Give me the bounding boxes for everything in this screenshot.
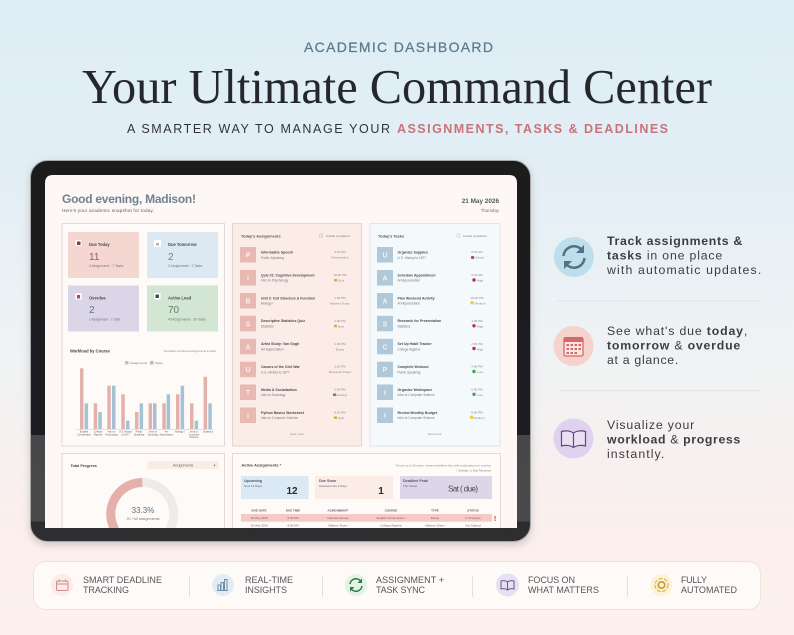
assignments table: Essay: [431, 516, 440, 520]
row: research presentation: [377, 316, 483, 331]
row: python: I: [247, 413, 249, 420]
row: cell structure: 1:00 PM: [334, 296, 346, 300]
row: complete workout: Public Speaking: [398, 370, 421, 374]
benefit: automated: FULLY: [681, 575, 708, 585]
row: organize supplies: Organize Supplies: [398, 250, 428, 254]
subtitle: ASSIGNMENTS, TASKS & DEADLINES: [397, 122, 668, 136]
assignments table: COURSE: [385, 508, 397, 512]
row: quiz 2: 10:00 PM: [333, 273, 347, 277]
stat: deadline peak: [400, 476, 492, 499]
benefit: task sync: [345, 574, 445, 596]
bar chart: workload by course: Speaking: [134, 433, 145, 436]
panel: today's assignments: Today's Assignments: [241, 234, 281, 238]
date: 21 May 2026: [462, 198, 499, 205]
row: organize supplies: U: [382, 252, 388, 260]
dropdown: [148, 461, 219, 469]
row: set up habit tracker: Set Up Habit Tracker: [398, 342, 432, 346]
row: complete workout: P: [383, 367, 388, 374]
assignments table: 19 May 2026: [250, 524, 268, 528]
row: python: Python Basics Worksheet: [261, 411, 305, 415]
row: schedule appointment: 9:30 AM: [471, 273, 483, 277]
greeting: Here's your academic snapshot for today.: [62, 208, 154, 213]
row: statistics quiz: S: [246, 321, 251, 328]
benefit: task sync: ASSIGNMENT +: [376, 575, 445, 585]
assignments table: Narrative Essay: [327, 516, 349, 520]
row: complete workout: [377, 362, 484, 377]
benefit: focus: [496, 574, 600, 596]
row: cell structure: B: [245, 298, 251, 306]
panel: today's tasks: [370, 224, 500, 446]
greeting: Good evening, Madison!: [62, 192, 196, 206]
row: civil war: Causes of the Civil War: [261, 365, 300, 369]
row: civil war: U: [245, 367, 251, 374]
assignments table: !: [494, 516, 496, 523]
bar chart: workload by course: Intro to: [190, 430, 198, 434]
row: research presentation: High: [477, 324, 483, 328]
row: statistics quiz: [240, 316, 346, 331]
eyebrow: ACADEMIC DASHBOARD: [304, 39, 493, 55]
row: python: 8:00 PM: [334, 410, 346, 414]
bar chart: workload by course: Sociology: [148, 433, 159, 436]
divider: [558, 390, 761, 391]
row: informative speech: [240, 247, 349, 262]
dropdown: ▾: [214, 464, 216, 468]
feature text: workload & progress: [606, 432, 741, 446]
chart legend: Tasks: [155, 361, 163, 365]
row: van gogh: Artist Study: Van Gogh: [261, 342, 299, 346]
row: review monthly budget: Intro to Computer Science: [398, 416, 435, 420]
feature text: See what's due today,: [607, 324, 748, 338]
feature: track assignments: [554, 234, 762, 277]
bar chart: workload by course: English: [80, 430, 89, 434]
row: set up habit tracker: High: [477, 347, 483, 351]
panel: active assignments: * Shows up to 20 active, nearest deadlines first, with exclamations on overdue: [394, 464, 491, 468]
benefit: deadline tracking: [51, 574, 163, 596]
greeting: [62, 194, 195, 213]
bar chart: workload by course: Intro to: [108, 430, 116, 434]
benefit: focus: FOCUS ON: [528, 575, 576, 585]
row: van gogh: [240, 339, 346, 354]
bottom benefits bar: [34, 562, 760, 610]
row: research presentation: Research for Presentation: [398, 319, 441, 323]
feature text: Visualize your: [607, 418, 695, 432]
row: set up habit tracker: College Algebra: [398, 347, 420, 351]
card: overdue: 2: [89, 305, 95, 316]
row: civil war: [240, 362, 351, 377]
card: due tomorrow: [147, 232, 218, 278]
feature text: with automatic updates.: [606, 263, 762, 277]
card: due today: 4 Assignments · 7 Tasks: [89, 264, 124, 268]
assignments table: English Composition I: [376, 516, 406, 520]
assignments table: [241, 508, 496, 528]
card: overdue: Overdue: [89, 296, 106, 300]
row: set up habit tracker: 2:00 PM: [471, 342, 483, 346]
card: due today: 11: [89, 252, 100, 263]
panel: active assignments: ! Overdue ⚠ Due Tomorrow: [457, 468, 492, 472]
stat: due soon: 1: [378, 486, 384, 497]
donut chart: 20 / 60 assignments: [126, 517, 160, 521]
feature text: [606, 234, 762, 277]
stat: upcoming: Next 14 Days: [244, 484, 263, 488]
row: informative speech: P: [246, 252, 251, 260]
row: organize workspace: Intro to Computer Science: [398, 393, 435, 397]
feature: due dates: [554, 324, 748, 367]
chart heading: [70, 349, 216, 354]
row: python: [240, 408, 346, 423]
row: quiz 2: [240, 270, 347, 286]
subtitle: A SMARTER WAY TO MANAGE YOUR: [127, 122, 390, 136]
bar chart: workload by course: Psychology: [105, 433, 119, 436]
bar chart: workload by course: Intro to: [149, 430, 157, 434]
row: schedule appointment: A: [382, 276, 388, 282]
row: cell structure: Biology I: [261, 302, 273, 306]
panel: today's tasks: view more: [427, 432, 442, 436]
row: organize workspace: Low: [477, 393, 484, 397]
row: research presentation: Statistics: [398, 324, 411, 328]
row: plan weekend activity: 10:00 PM: [470, 296, 484, 300]
subtitle: [127, 122, 668, 136]
card: active load: 70: [168, 305, 180, 316]
panel: today's assignments: [232, 224, 362, 446]
assignments table: Midterm Exam: [328, 524, 348, 528]
row: van gogh: Essay: [336, 347, 345, 351]
row: set up habit tracker: [377, 339, 483, 354]
header: [82, 39, 712, 136]
row: review monthly budget: [377, 408, 485, 423]
stat: upcoming: 12: [286, 486, 298, 497]
panel: active assignments: [232, 454, 500, 534]
row: informative speech: Public Speaking: [261, 256, 284, 260]
row: civil war: Research Paper: [329, 370, 351, 374]
assignments table: Midterm Exam: [425, 524, 445, 528]
donut chart: [111, 482, 174, 546]
row: statistics quiz: Statistics: [261, 324, 274, 328]
bar chart: workload by course: to 1877: [121, 433, 130, 436]
card: active load: 40 Assignments · 30 Tasks: [168, 318, 206, 322]
feature text: at a glance.: [607, 353, 679, 367]
bar chart: workload by course: College: [94, 430, 103, 434]
row: organize supplies: [377, 247, 484, 262]
row: organize workspace: Organize Workspace: [398, 388, 432, 392]
row: review monthly budget: 8:00 PM: [471, 410, 483, 414]
feature text: tasks in one place: [607, 248, 723, 262]
panel: summary and workload: [62, 224, 224, 446]
panel: total progress: [62, 453, 225, 528]
assignments table: 8:00 AM: [287, 524, 299, 528]
row: review monthly budget: I: [384, 413, 386, 420]
stat: due soon: Due Soon: [319, 479, 337, 483]
bar chart: workload by course: Biology I: [175, 430, 185, 434]
row: informative speech: Informative Speech: [261, 250, 293, 254]
row: socialization: [240, 384, 347, 400]
date: [462, 198, 500, 213]
date: Thursday: [481, 208, 500, 213]
assignments table: TYPE: [431, 508, 439, 512]
assignments table: ASSIGNMENT*: [327, 508, 349, 512]
row: research presentation: S: [383, 321, 388, 328]
stat: due soon: [315, 476, 393, 499]
row: civil war: 5:30 PM: [334, 365, 346, 369]
bar chart: workload by course: Algebra: [94, 433, 103, 436]
feature: visualize: [554, 418, 741, 461]
row: socialization: Media & Socialization: [261, 388, 297, 392]
panel: active assignments: Active Assignments *: [242, 462, 282, 468]
row: python: Quiz: [338, 416, 345, 420]
row: quiz 2: I: [247, 276, 249, 282]
bar chart: workload by course: Art: [165, 430, 168, 434]
bar chart: workload by course: [76, 368, 214, 439]
row: complete workout: 4:00 PM: [471, 365, 483, 369]
assignments table: 9:00 PM: [287, 516, 299, 520]
row: schedule appointment: Art Appreciation: [398, 279, 420, 283]
row: informative speech: 9:30 AM: [334, 250, 346, 254]
row: socialization: Intro to Sociology: [261, 393, 286, 397]
row: plan weekend activity: Medium: [474, 301, 486, 305]
feature text: [606, 418, 741, 461]
row: schedule appointment: [377, 270, 483, 286]
row: python: Intro to Computer Science: [261, 416, 298, 420]
panel: today's tasks: Today's Tasks: [378, 234, 404, 238]
benefit: real-time insights: INSIGHTS: [245, 585, 288, 595]
row: quiz 2: Intro to Psychology: [261, 279, 289, 283]
assignments table: DUE DATE: [251, 508, 267, 512]
chart legend: Assignments: [130, 361, 148, 365]
donut chart: 33.3%: [132, 506, 154, 515]
feature text: instantly.: [607, 447, 665, 461]
card: due today: [68, 232, 139, 278]
benefit: automated: AUTOMATED: [681, 585, 738, 595]
assignments table: College Algebra: [380, 524, 402, 528]
feature text: [607, 324, 748, 367]
row: civil war: U.S. History to 1877: [261, 370, 290, 374]
benefit: deadline tracking: SMART DEADLINE: [83, 575, 163, 585]
bar chart: workload by course: Appreciation: [160, 433, 174, 436]
card: due tomorrow: Due Tomorrow: [168, 242, 197, 247]
row: cell structure: Unit 3: Cell Structure & Function: [261, 296, 315, 300]
assignments table: Not Started: [465, 524, 481, 528]
row: review monthly budget: Medium: [473, 416, 485, 420]
row: statistics quiz: Quiz: [338, 324, 345, 328]
panel: today's assignments: include completed: [326, 234, 350, 238]
benefit: real-time insights: [212, 574, 294, 596]
chart heading: Workload by Course: [70, 348, 110, 354]
row: complete workout: Complete Workout: [398, 365, 429, 369]
screen: [45, 175, 517, 546]
feature text: tomorrow & overdue: [607, 338, 741, 352]
bar chart: workload by course: Science: [190, 436, 199, 439]
row: socialization: T: [246, 390, 251, 397]
title: Your Ultimate Command Center: [82, 59, 712, 114]
row: organize supplies: 8:00 AM: [471, 250, 483, 254]
row: socialization: Reading: [335, 393, 347, 397]
icon: calendar: [554, 326, 594, 366]
row: schedule appointment: Schedule Appointment: [398, 273, 436, 277]
benefit: focus: WHAT MATTERS: [528, 585, 600, 595]
assignments table: DUE TIME: [286, 508, 300, 512]
row: statistics quiz: 2:00 PM: [334, 319, 346, 323]
panel: today's assignments: view more: [290, 432, 304, 436]
stat: deadline peak: This Week: [403, 484, 418, 488]
card: due today: Due Today: [89, 242, 110, 247]
row: van gogh: 4:00 PM: [334, 342, 346, 346]
row: schedule appointment: High: [477, 278, 483, 282]
row: organize workspace: [377, 384, 484, 400]
row: cell structure: Midterm Exam: [330, 301, 350, 305]
row: organize workspace: I: [384, 390, 386, 397]
panel: today's tasks: include completed: [463, 234, 487, 238]
bar chart: workload by course: Composition: [77, 433, 92, 436]
stat: upcoming: [241, 476, 308, 499]
benefit: automated: [650, 574, 738, 596]
divider: [557, 300, 760, 302]
tablet: [30, 160, 530, 546]
card: overdue: 1 Assignment · 1 Task: [89, 318, 121, 322]
dropdown: Assignments: [173, 464, 193, 468]
icon: open book: [554, 418, 594, 458]
row: informative speech: Presentation: [331, 256, 349, 260]
assignments table: STATUS: [467, 508, 479, 512]
bar chart: workload by course: U.S. History: [119, 430, 133, 434]
assignments table: In Progress: [465, 516, 481, 520]
stat: deadline peak: Deadline Peak: [403, 479, 429, 483]
benefit: real-time insights: REAL-TIME: [245, 575, 294, 585]
row: plan weekend activity: [377, 293, 486, 308]
card: active load: [147, 286, 218, 332]
benefit: task sync: TASK SYNC: [376, 585, 426, 595]
card: due tomorrow: 2 Assignments · 1 Tasks: [168, 264, 203, 268]
row: cell structure: [240, 293, 350, 308]
benefit: deadline tracking: TRACKING: [83, 585, 130, 595]
row: set up habit tracker: C: [382, 344, 388, 351]
row: van gogh: A: [245, 344, 251, 351]
panel: total progress: Total Progress: [70, 464, 97, 468]
assignments table: 18 May 2026: [250, 516, 268, 520]
row: socialization: 5:59 PM: [334, 388, 346, 392]
row: quiz 2: Quiz #2: Cognitive Development: [261, 273, 315, 277]
chart heading: * Excludes completed assignments & tasks: [163, 349, 217, 353]
row: review monthly budget: Review Monthly Budget: [398, 411, 438, 415]
card: overdue: [68, 286, 139, 332]
row: complete workout: Low: [477, 370, 484, 374]
row: organize workspace: 6:00 PM: [471, 388, 483, 392]
row: research presentation: 1:00 PM: [471, 319, 483, 323]
row: organize supplies: Critical: [474, 256, 484, 260]
bar chart: workload by course: Statistics: [203, 430, 214, 434]
stat: upcoming: Upcoming: [244, 479, 262, 483]
icon: sync arrows: [554, 237, 594, 277]
card: due tomorrow: 2: [168, 252, 174, 263]
row: plan weekend activity: Art Appreciation: [398, 302, 420, 306]
stat: due soon: Assessments 3 Days: [319, 484, 348, 488]
row: quiz 2: Quiz: [338, 278, 345, 282]
row: statistics quiz: Descriptive Statistics Quiz: [261, 319, 305, 323]
bar chart: workload by course: Public: [136, 430, 143, 434]
row: organize supplies: U.S. History to 1877: [398, 256, 426, 260]
row: plan weekend activity: A: [382, 298, 388, 306]
tablet bezel: [30, 160, 530, 542]
row: van gogh: Art Appreciation: [261, 347, 284, 351]
stat: deadline peak: Sat ( due): [448, 484, 478, 494]
feature text: Track assignments &: [607, 234, 743, 248]
card: active load: Active Load: [168, 296, 192, 300]
chart legend: [125, 361, 162, 364]
row: plan weekend activity: Plan Weekend Activity: [398, 296, 435, 300]
bar chart: workload by course: Computer: [189, 433, 200, 436]
